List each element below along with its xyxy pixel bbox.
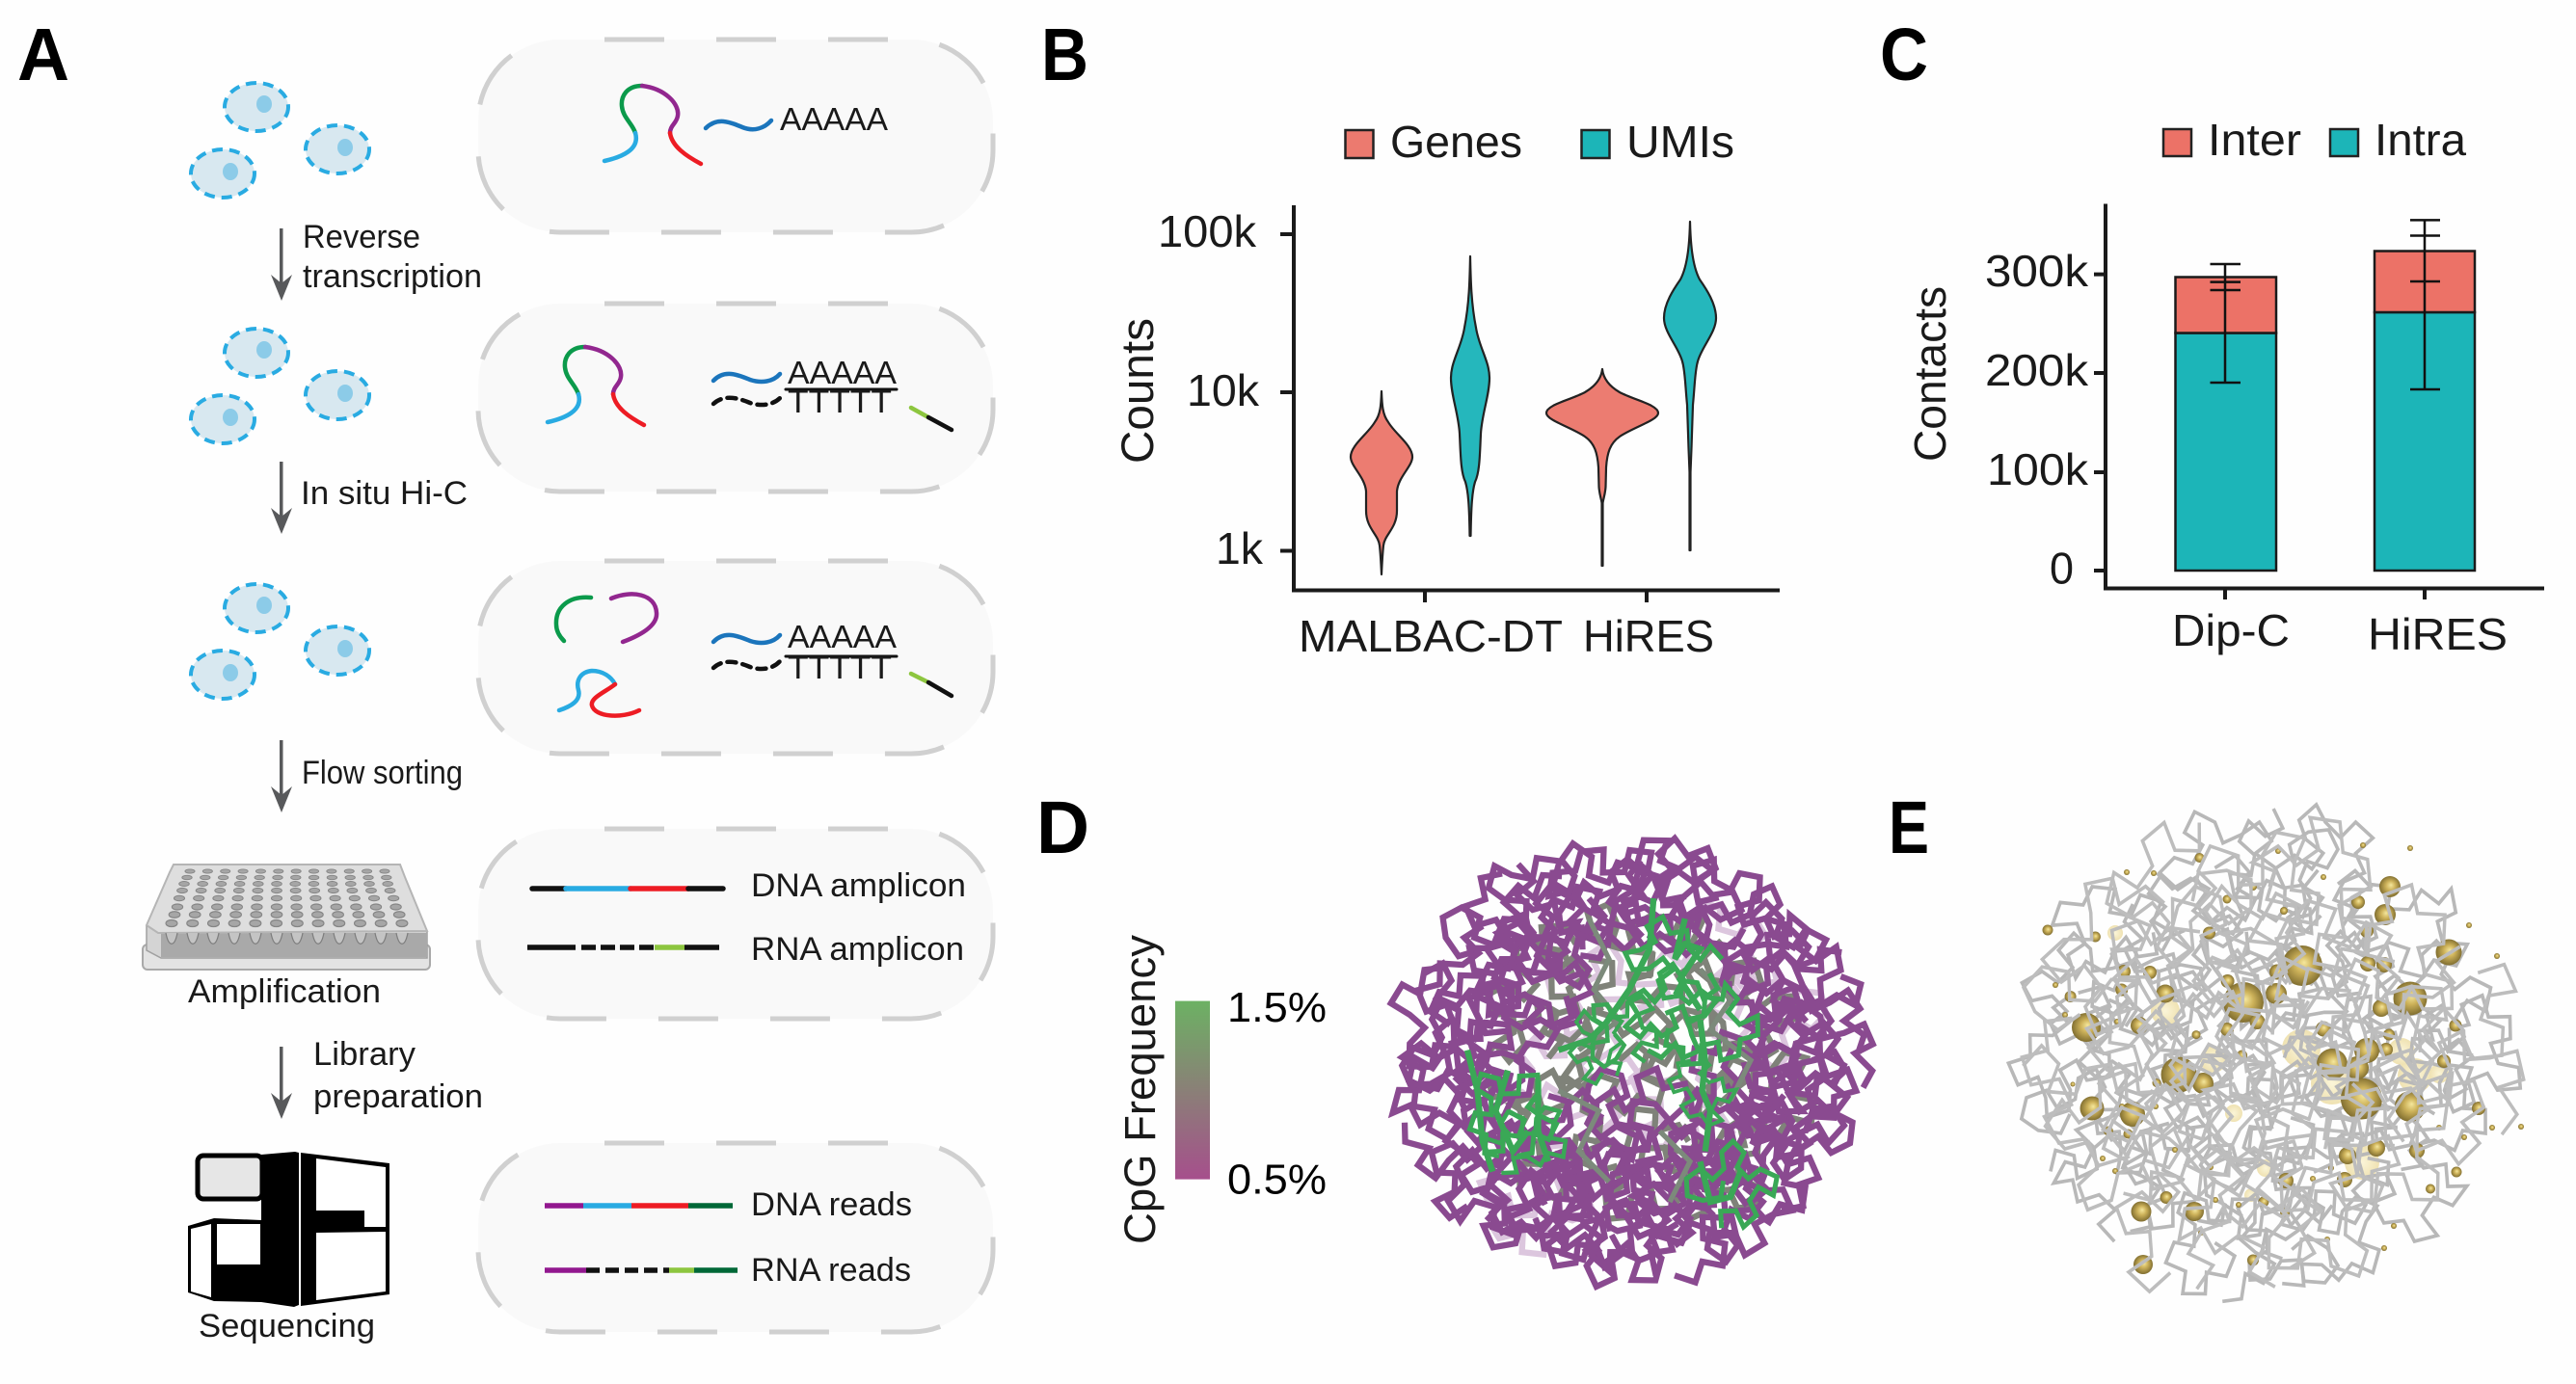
chart: violin plot of counts bbox=[1112, 205, 1780, 661]
grey strands in front bbox=[1988, 793, 2541, 1312]
y tick labels: 200k bbox=[1985, 345, 2089, 395]
panel letter D: D bbox=[1036, 786, 1089, 869]
pill: amplicons bbox=[478, 829, 993, 1019]
panel letter C: C bbox=[1880, 13, 1928, 96]
label: reverse transcription: transcription bbox=[303, 258, 482, 295]
arrow: in situ Hi-C bbox=[271, 462, 292, 534]
y tick labels: 0 bbox=[2050, 544, 2074, 594]
legend: inter and intra: Inter bbox=[2208, 115, 2301, 165]
label: sequencing: Sequencing bbox=[199, 1308, 375, 1344]
RNA amplicon line bbox=[527, 945, 719, 950]
y axis title: Counts bbox=[1112, 318, 1163, 464]
DNA fragment curve bbox=[548, 347, 644, 425]
RNA reads line bbox=[545, 1267, 738, 1273]
purple low-frequency strands bbox=[1375, 812, 1882, 1304]
faded strands bbox=[1459, 900, 1843, 1273]
chart: stacked bars of contacts bbox=[1905, 204, 2544, 659]
legend: CpG frequency color bar: 1.5% bbox=[1227, 984, 1327, 1031]
legend: CpG frequency color bar: CpG Frequency bbox=[1115, 934, 1165, 1244]
violin: UMIs MALBAC-DT bbox=[1451, 256, 1489, 536]
legend: CpG frequency color bar bbox=[1115, 934, 1327, 1244]
pill: reads bbox=[478, 1143, 993, 1332]
violin: genes HiRES bbox=[1546, 369, 1658, 566]
legend: genes and UMIs: UMIs bbox=[1626, 117, 1734, 167]
y tick labels bbox=[1985, 246, 2089, 594]
legend: CpG frequency color bar: 0.5% bbox=[1227, 1157, 1327, 1203]
legend: inter and intra bbox=[2163, 115, 2466, 165]
DNA reads line bbox=[545, 1203, 733, 1209]
x tick labels: Dip-C bbox=[2172, 605, 2290, 655]
pill: in situ Hi-C: TTTTT bbox=[788, 650, 892, 685]
axes bbox=[1280, 205, 1780, 602]
grey strands over purple bbox=[1558, 918, 1751, 1202]
DNA amplicon line bbox=[532, 886, 723, 892]
violin: genes MALBAC-DT bbox=[1351, 391, 1412, 574]
RNA amplicon label: RNA amplicon bbox=[751, 931, 964, 968]
grey strands behind spheres bbox=[1996, 785, 2550, 1322]
mRNA and cDNA strands bbox=[713, 374, 952, 430]
y tick labels: 10k bbox=[1187, 365, 1260, 415]
legend: genes and UMIs bbox=[1346, 117, 1734, 167]
arrow: reverse transcription bbox=[271, 228, 292, 301]
label: library preparation: preparation bbox=[313, 1078, 483, 1115]
RNA reads label: RNA reads bbox=[751, 1252, 911, 1289]
label: in situ Hi-C: In situ Hi-C bbox=[301, 475, 468, 512]
label: flow sorting: Flow sorting bbox=[302, 755, 463, 791]
DNA fragment curve bbox=[604, 86, 771, 164]
panel letter E: E bbox=[1889, 786, 1929, 869]
axes bbox=[2094, 204, 2544, 599]
legend: inter and intra: Intra bbox=[2375, 115, 2466, 165]
polyA and polyT labels: AAAAA bbox=[788, 355, 897, 390]
polyA and polyT labels: AAAAA bbox=[788, 619, 897, 654]
y tick labels: 100k bbox=[1987, 444, 2089, 494]
polyA label: AAAAA bbox=[780, 101, 888, 137]
cells: step 3 bbox=[191, 584, 369, 699]
gold spheres bbox=[2042, 842, 2524, 1274]
pale distant spheres bbox=[2107, 925, 2449, 1202]
pill: mRNA and genome bbox=[478, 40, 993, 232]
x tick labels bbox=[1299, 611, 1714, 661]
label: library preparation: Library bbox=[313, 1036, 416, 1073]
pill: reverse transcription: TTTTT bbox=[788, 384, 892, 419]
label: reverse transcription bbox=[303, 219, 482, 295]
icon: 96-well plate bbox=[143, 865, 430, 970]
chart: 3D genome colored by CpG frequency bbox=[1375, 812, 1882, 1304]
panel letter A: A bbox=[17, 13, 69, 96]
ligated DNA curves bbox=[556, 594, 952, 716]
arrow: library preparation bbox=[271, 1047, 292, 1119]
y axis title: Contacts bbox=[1905, 286, 1955, 462]
pill: reverse transcription bbox=[478, 304, 993, 492]
y tick labels bbox=[1158, 206, 1264, 573]
cells: step 2 bbox=[191, 329, 369, 443]
x tick labels: MALBAC-DT bbox=[1299, 611, 1563, 661]
icon: sequencer bbox=[188, 1152, 389, 1307]
bar: HiRES bbox=[2375, 251, 2475, 571]
green high-frequency strands bbox=[1449, 898, 1789, 1241]
y tick labels: 300k bbox=[1985, 246, 2089, 296]
violin: UMIs HiRES bbox=[1664, 222, 1716, 550]
chart: 3D genome with gold spheres bbox=[1988, 785, 2550, 1322]
label: amplification: Amplification bbox=[188, 973, 381, 1010]
label: reverse transcription: Reverse bbox=[303, 219, 420, 255]
pill: in situ Hi-C bbox=[478, 561, 993, 754]
error bars: Dip-C bbox=[2210, 264, 2241, 383]
y tick labels: 1k bbox=[1216, 523, 1264, 573]
x tick labels: HiRES bbox=[2368, 609, 2508, 659]
legend: genes and UMIs: Genes bbox=[1390, 117, 1522, 167]
label: library preparation bbox=[313, 1036, 483, 1115]
bar: Dip-C bbox=[2175, 278, 2276, 571]
x tick labels: HiRES bbox=[1583, 611, 1714, 661]
DNA reads label: DNA reads bbox=[751, 1186, 912, 1223]
DNA amplicon label: DNA amplicon bbox=[751, 867, 966, 904]
error bars: HiRES bbox=[2410, 220, 2440, 389]
arrow: flow sorting bbox=[271, 740, 292, 812]
panel letter B: B bbox=[1041, 13, 1088, 96]
x tick labels bbox=[2172, 605, 2508, 659]
grey mid-frequency strands bbox=[1471, 881, 1836, 1249]
y tick labels: 100k bbox=[1158, 206, 1257, 256]
cells: step 1 bbox=[191, 83, 369, 198]
